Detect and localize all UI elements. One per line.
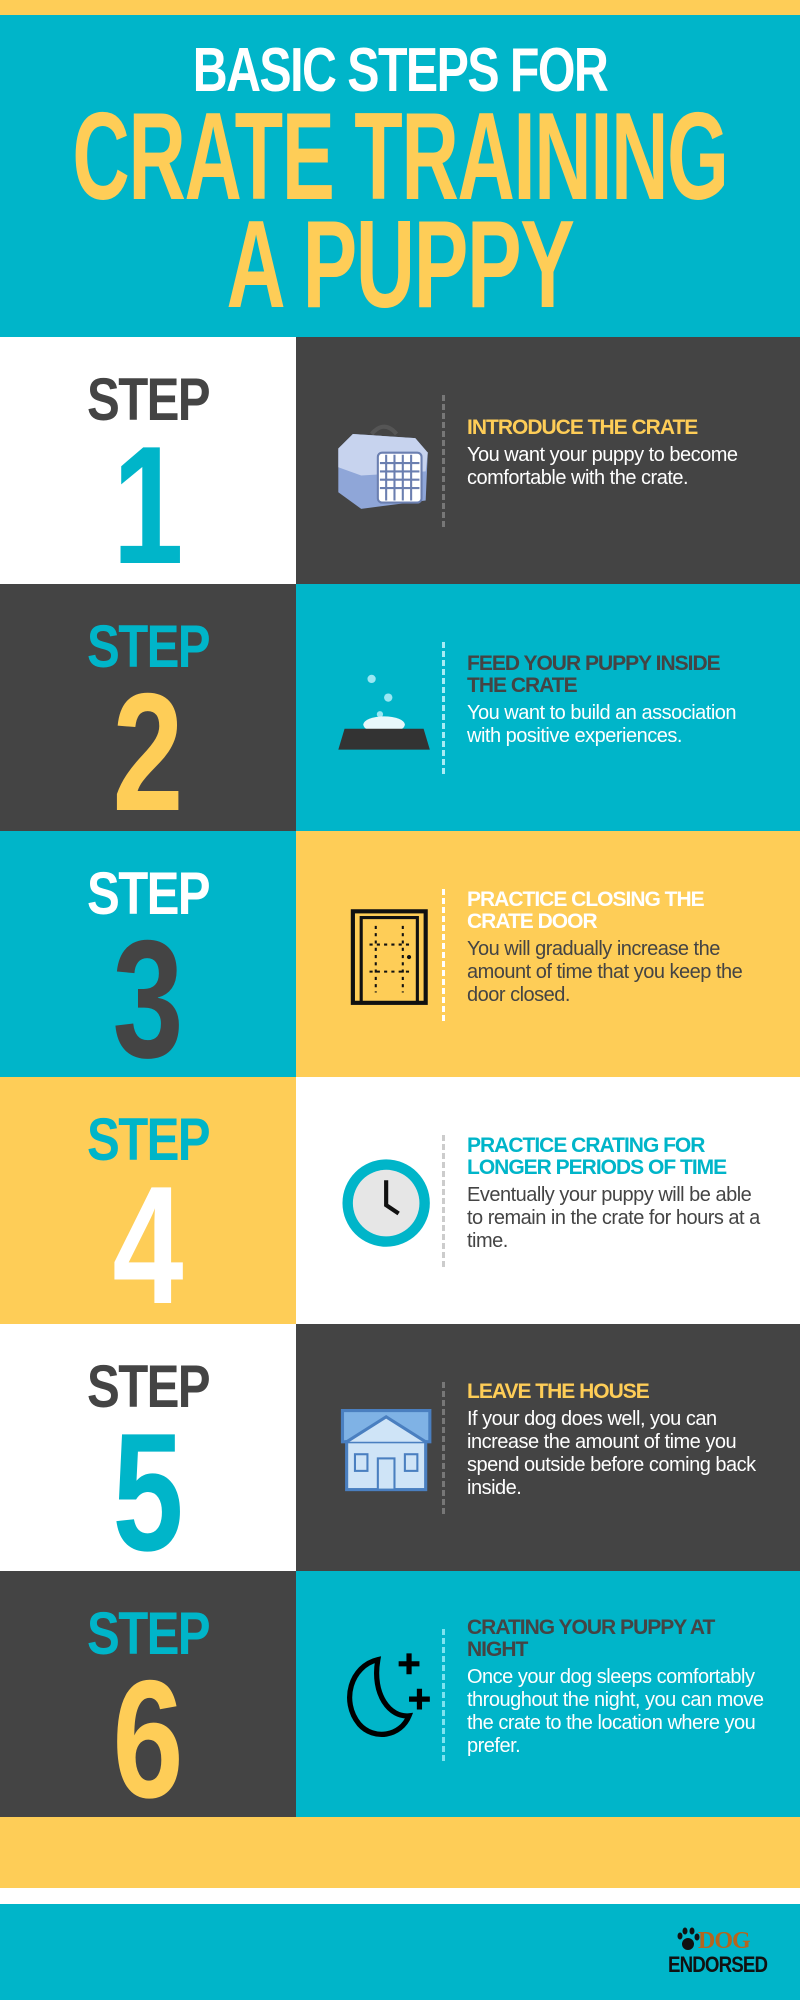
icon: crate [338,424,428,509]
step 4: PRACTICE CRATING FOR LONGER PERIODS OF TIME [467,1134,726,1178]
logo: ENDORSED [668,1952,767,1977]
step 6 [0,1571,800,1833]
icon: paw [678,1928,700,1950]
step 3: PRACTICE CLOSING THE CRATE DOOR [467,888,704,932]
step 2: STEP [87,613,209,680]
step 1 [87,337,800,599]
step 2: You want to build an association with positive experiences. [467,702,736,747]
icon: door [350,909,428,1005]
icon: clock [342,1159,430,1247]
step 4: Eventually your puppy will be able to remain in the crate for hours at a time. [467,1184,760,1252]
step 2 [0,584,800,846]
step 1: STEP [87,366,209,433]
step 5: LEAVE THE HOUSE [467,1380,649,1403]
step 3 [0,831,800,1093]
step 4: 4 [112,1151,184,1339]
icon: bowl [338,674,430,750]
top bar [0,0,800,15]
step 5 [87,1324,800,1586]
step 6: Once your dog sleeps comfortably throughout the night, you can move the crate to the location where you prefer. [467,1666,764,1757]
header [0,15,800,337]
step 5: If your dog does well, you can increase the amount of time you spend outside before coming back inside. [467,1408,756,1499]
step 3: You will gradually increase the amount of time that you keep the door closed. [467,938,742,1006]
step 6: STEP [87,1600,209,1667]
footer [0,1904,800,2000]
yellow band [0,1817,800,1888]
step 3: 3 [112,905,184,1093]
step 2: 2 [112,658,184,846]
step 4 [0,1077,800,1339]
step 3: STEP [87,860,209,927]
icon: house [340,1409,432,1492]
step 1: INTRODUCE THE CRATE [467,416,697,439]
step 1: 1 [112,411,184,599]
logo: DOG [698,1928,750,1954]
step 2: FEED YOUR PUPPY INSIDE THE CRATE [467,652,720,697]
icon: moon [347,1653,430,1737]
logo [668,1928,768,1977]
title line 3: A PUPPY [226,196,574,334]
step 5: STEP [87,1353,209,1420]
step 5: 5 [112,1398,184,1586]
step 1: You want your puppy to become comfortable with the crate. [467,444,738,489]
title line 1: BASIC STEPS FOR [193,36,607,105]
step 4: STEP [87,1106,209,1173]
title line 2: CRATE TRAINING [72,88,728,226]
step 6: 6 [112,1645,184,1833]
step 6: CRATING YOUR PUPPY AT NIGHT [467,1616,714,1661]
